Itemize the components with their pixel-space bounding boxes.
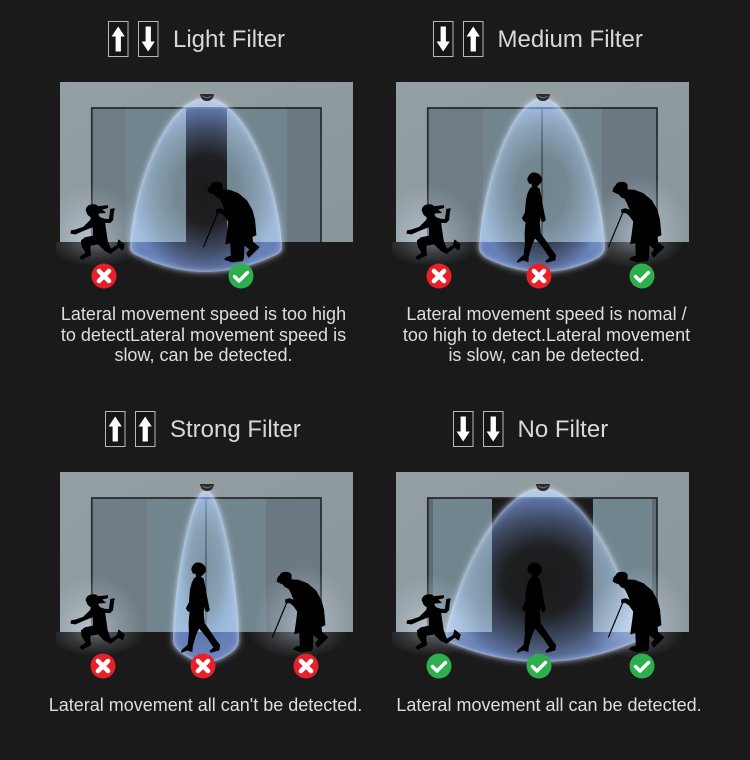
light filter heading: Light Filter [173, 26, 285, 53]
sensor [536, 94, 550, 101]
rejected mark [426, 264, 452, 288]
no filter heading: No Filter [518, 416, 608, 443]
light filter description: slow, can be detected. [114, 345, 293, 365]
medium filter heading [434, 22, 643, 56]
glow behind elderly figure [584, 565, 690, 689]
elderly figure [203, 182, 259, 262]
rejected mark [526, 264, 552, 288]
detected mark [526, 654, 552, 678]
no filter heading [454, 412, 608, 446]
medium filter heading: Medium Filter [498, 26, 643, 53]
walking woman figure [517, 173, 556, 262]
detected mark [630, 654, 654, 678]
walking woman figure [181, 563, 220, 652]
child figure [407, 595, 460, 649]
glow behind child [40, 574, 146, 690]
detection beam [479, 98, 605, 272]
no filter description: Lateral movement all can be detected. [396, 695, 702, 715]
detection beam [130, 98, 282, 272]
glow behind child [376, 184, 482, 300]
child figure [407, 205, 460, 259]
elderly figure [608, 572, 664, 652]
medium filter description: Lateral movement speed is nomal / [406, 304, 687, 324]
sensor [200, 484, 214, 491]
light filter illustration [40, 82, 353, 300]
glow behind child [40, 184, 146, 300]
child figure [71, 205, 124, 259]
medium filter description: too high to detect.Lateral movement [403, 325, 690, 345]
strong filter heading [106, 412, 301, 446]
rejected mark [190, 654, 216, 678]
panel: medium filter [376, 22, 690, 365]
glow behind elderly figure [584, 175, 690, 299]
light filter description: Lateral movement speed is too high [61, 304, 346, 324]
light filter heading [108, 22, 285, 56]
detection beam [173, 490, 239, 662]
no filter illustration [376, 472, 690, 690]
sensor [536, 484, 550, 491]
medium filter illustration [376, 82, 690, 300]
elderly figure [272, 572, 328, 652]
rejected mark [294, 654, 318, 678]
rejected mark [90, 654, 116, 678]
panel: light filter [40, 22, 353, 365]
detected mark [426, 654, 452, 678]
child figure [71, 595, 124, 649]
detected mark [228, 264, 254, 288]
detection beam [444, 488, 640, 662]
strong filter description: Lateral movement all can't be detected. [49, 695, 362, 715]
glow behind child [376, 574, 482, 690]
strong filter heading: Strong Filter [170, 416, 301, 443]
light filter description: to detectLateral movement speed is [61, 325, 346, 345]
rejected mark [92, 264, 116, 288]
walking woman figure [517, 563, 556, 652]
panel: no filter [376, 412, 702, 715]
panel: strong filter [40, 412, 362, 715]
sensor [200, 94, 214, 101]
glow behind elderly figure [248, 565, 354, 689]
strong filter illustration [40, 472, 354, 690]
detected mark [630, 264, 654, 288]
medium filter description: is slow, can be detected. [448, 345, 645, 365]
elderly figure [608, 182, 664, 262]
